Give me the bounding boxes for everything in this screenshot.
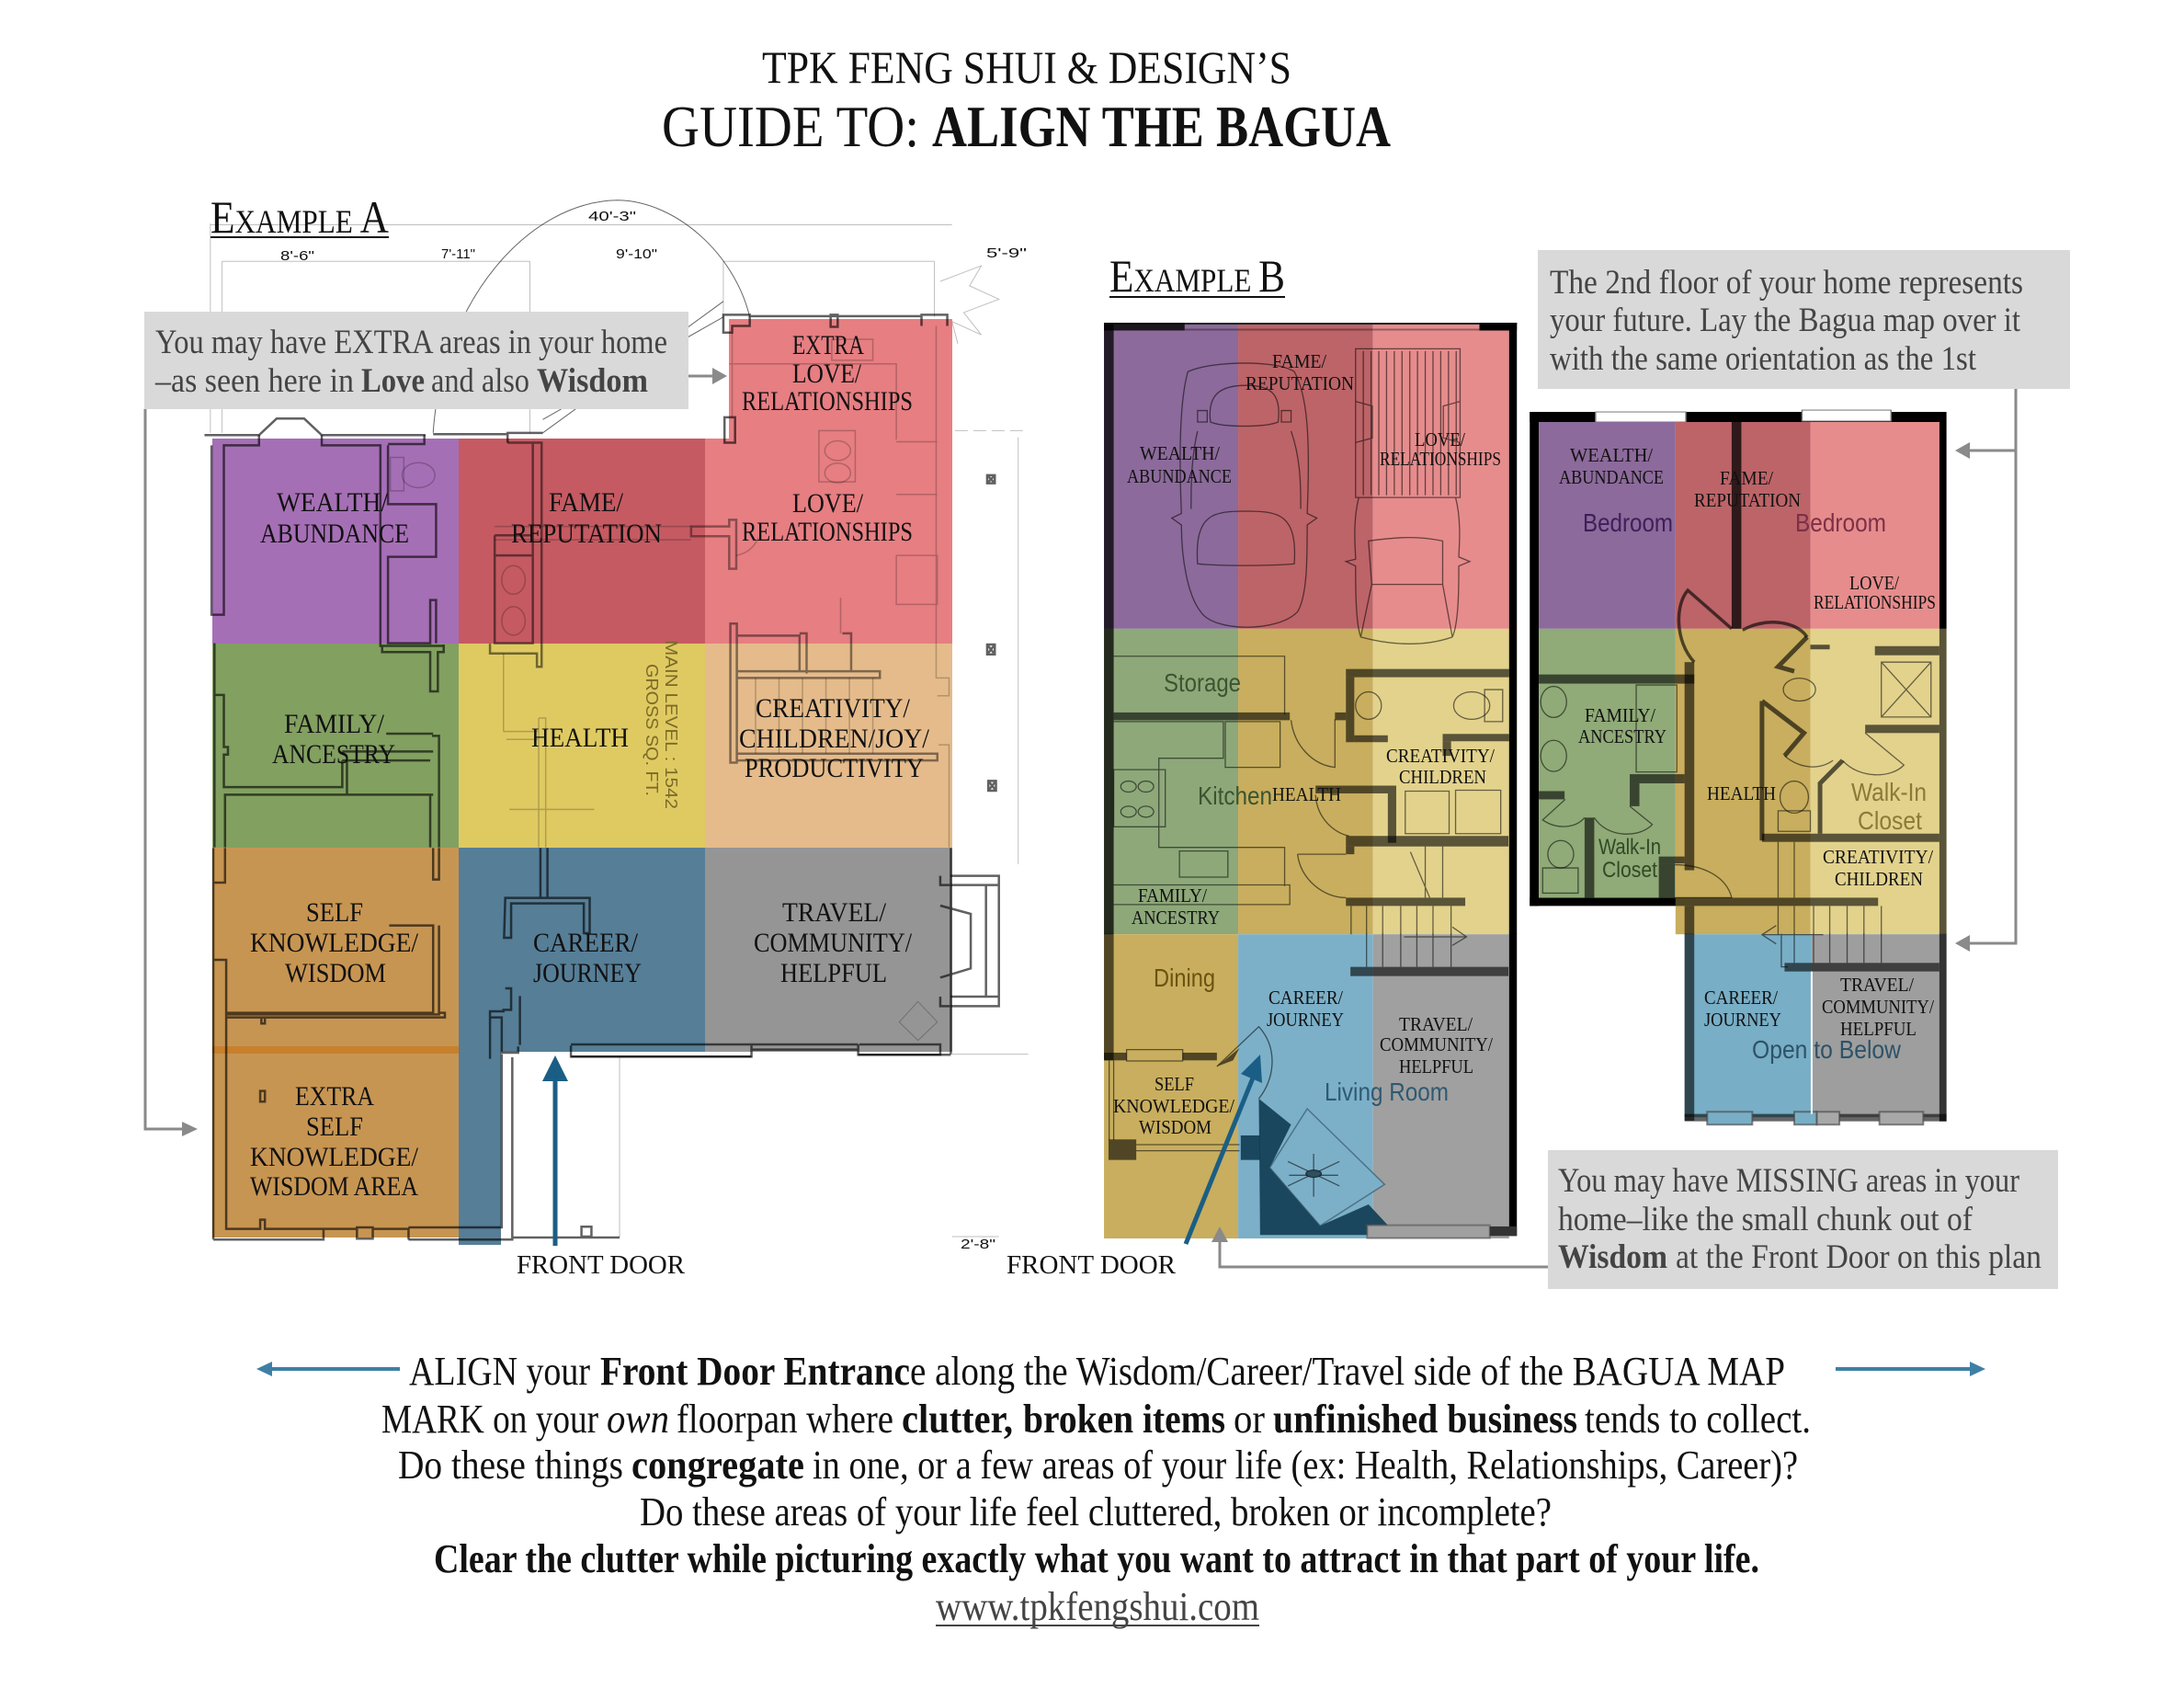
room labels B first floor: Living Room	[1325, 1078, 1449, 1106]
arrow: front door B	[1186, 1055, 1262, 1244]
labels: example A bagua areas: RELATIONSHIPS	[742, 517, 913, 547]
labels: example B first floor areas: ABUNDANCE	[1127, 465, 1232, 487]
labels: second floor bagua areas: JOURNEY	[1704, 1009, 1781, 1031]
labels: example A bagua areas: COMMUNITY/	[754, 928, 913, 958]
labels: example A bagua areas: FAMILY/	[284, 709, 385, 739]
instructions text block: floorpan where	[677, 1397, 893, 1442]
panel: example B second floor	[1211, 250, 2070, 1289]
labels: example A bagua areas: LOVE/	[792, 488, 864, 519]
rotated plan note: GROSS SQ. FT.	[643, 664, 661, 796]
labels: example A bagua areas: HEALTH	[531, 723, 629, 753]
room labels second floor: Closet	[1602, 858, 1657, 883]
labels: example A bagua areas: ANCESTRY	[272, 739, 395, 770]
callout: second floor	[1538, 250, 2070, 389]
plan: black outer walls bottom A	[408, 876, 1029, 1239]
instructions text block: broken items	[1023, 1397, 1225, 1442]
labels: example A bagua areas: KNOWLEDGE/	[250, 1142, 419, 1172]
callout: extra areas	[144, 312, 688, 409]
labels: example B first floor areas: TRAVEL/	[1399, 1013, 1473, 1035]
labels: example B first floor areas: WISDOM	[1139, 1116, 1211, 1138]
arrow: callout to extra wisdom	[145, 409, 198, 1136]
callout: extra areas: Love	[361, 362, 425, 400]
callout: second floor: your future. Lay the Bagua map over it	[1550, 302, 2021, 339]
callout: second floor: The 2nd floor of your home represents	[1550, 264, 2023, 302]
dimension labels: 2'-8"	[961, 1237, 995, 1252]
labels: second floor bagua areas: REPUTATION	[1694, 489, 1801, 511]
callout: extra areas: Wisdom	[537, 362, 648, 400]
rotated plan note	[643, 640, 680, 809]
room labels second floor: Walk-In	[1598, 835, 1661, 860]
labels: second floor bagua areas: COMMUNITY/	[1822, 996, 1934, 1018]
labels: example A bagua areas: RELATIONSHIPS	[742, 386, 913, 416]
labels: example B first floor areas	[1113, 350, 1501, 1138]
labels: second floor bagua areas: CHILDREN	[1835, 868, 1923, 890]
room labels second floor: Closet	[1858, 806, 1922, 835]
room labels B first floor: Kitchen	[1198, 781, 1272, 810]
title: ALIGN THE BAGUA	[932, 94, 1391, 159]
labels: example A bagua areas: CREATIVITY/	[756, 693, 911, 724]
instructions text block: congregate	[631, 1443, 804, 1488]
labels: example A bagua areas: SELF	[306, 1112, 363, 1142]
labels: second floor bagua areas: ABUNDANCE	[1559, 466, 1664, 488]
heading: example A: EXAMPLE A	[210, 191, 389, 243]
labels: example A bagua areas: PRODUCTIVITY	[745, 753, 924, 783]
labels: example A bagua areas: REPUTATION	[511, 519, 662, 549]
instructions text block: Clear the clutter while picturing exactly what you want to attract in that part of your life.	[434, 1536, 1759, 1581]
room labels second floor: Bedroom	[1583, 508, 1673, 537]
labels: example B first floor areas: CAREER/	[1268, 987, 1343, 1009]
labels: example B first floor areas: REPUTATION	[1246, 372, 1354, 394]
labels: example B first floor areas: HELPFUL	[1399, 1055, 1473, 1078]
room labels B first floor: Dining	[1154, 964, 1215, 992]
instructions text block: tends to collect.	[1585, 1397, 1811, 1442]
instructions text block: e along the Wisdom/Career/Travel side of the BAGUA MAP	[910, 1349, 1785, 1394]
labels: second floor bagua areas: TRAVEL/	[1840, 974, 1914, 996]
labels: example A bagua areas: EXTRA	[792, 330, 864, 360]
labels: second floor bagua areas: LOVE/	[1849, 572, 1899, 594]
dimension labels: 40'-3"	[588, 209, 636, 224]
instructions text block: clutter,	[902, 1397, 1013, 1442]
labels: example A bagua areas: CAREER/	[533, 928, 639, 958]
arrow: missing callout to wisdom	[1211, 1226, 1548, 1267]
labels: example B first floor areas: WEALTH/	[1140, 442, 1220, 464]
labels: example A bagua areas: EXTRA	[295, 1081, 374, 1112]
labels: example B first floor areas: JOURNEY	[1267, 1009, 1344, 1031]
callout: missing areas: You may have MISSING areas in your	[1558, 1162, 2019, 1200]
room labels second floor: Walk-In	[1851, 778, 1927, 806]
labels: example B first floor areas: KNOWLEDGE/	[1113, 1095, 1234, 1117]
labels: second floor bagua areas: CREATIVITY/	[1823, 846, 1933, 868]
labels: example A bagua areas: WISDOM	[285, 958, 386, 988]
instructions text block: Do these areas of your life feel cluttered, broken or incomplete?	[640, 1489, 1552, 1534]
bagua colour grid A	[212, 319, 952, 1245]
labels: second floor bagua areas: HEALTH	[1707, 782, 1776, 804]
labels: example A bagua areas: ABUNDANCE	[260, 519, 409, 549]
room labels second floor: Open to Below	[1752, 1035, 1902, 1064]
room labels second floor	[1583, 508, 1927, 1064]
callout: extra areas: –as seen here in	[154, 362, 354, 400]
labels: example B first floor areas: SELF	[1155, 1073, 1194, 1095]
plan: walls second floor lower	[1685, 926, 1947, 1124]
dimension labels	[280, 209, 1027, 1252]
label: front door A: FRONT DOOR	[517, 1251, 685, 1280]
labels: example A bagua areas: HELPFUL	[780, 958, 887, 988]
panel: example B first floor	[1007, 250, 1517, 1280]
dimension labels: 8'-6"	[280, 248, 314, 264]
labels: example B first floor areas: RELATIONSHIPS	[1380, 448, 1501, 470]
labels: second floor bagua areas: ANCESTRY	[1578, 725, 1666, 747]
plan: walls lower B	[1104, 927, 1517, 1238]
labels: second floor bagua areas: HELPFUL	[1840, 1018, 1917, 1040]
callout: missing areas: Wisdom	[1558, 1238, 1667, 1276]
title: TPK FENG SHUI & DESIGN’S	[762, 41, 1291, 93]
callout: second floor: with the same orientation as the 1st	[1550, 340, 1977, 378]
arrow: callout to extra love	[688, 368, 727, 384]
dimension labels: 7'-11"	[441, 246, 475, 262]
instructions text block: Front Door Entranc	[600, 1349, 910, 1394]
labels: example A bagua areas: FAME/	[549, 487, 624, 518]
black outer shell second floor	[1530, 410, 1947, 906]
bagua colour grid second floor	[1539, 422, 1947, 1117]
plan: walls lower A	[213, 848, 971, 1239]
labels: example B first floor areas: CREATIVITY/	[1386, 745, 1495, 767]
labels: example B first floor areas: ANCESTRY	[1132, 907, 1220, 929]
instructions text block: Do these things	[398, 1443, 623, 1488]
arrow: bottom left	[256, 1362, 400, 1376]
labels: second floor bagua areas: RELATIONSHIPS	[1814, 591, 1936, 613]
rotated plan note: MAIN LEVEL : 1542	[662, 640, 680, 809]
callout: extra areas: You may have EXTRA areas in your home	[155, 324, 667, 361]
instructions text block: own	[607, 1397, 669, 1442]
plan: cars and walls upper B	[1104, 323, 1517, 934]
labels: example B first floor areas: LOVE/	[1415, 428, 1465, 451]
dimension labels: 9'-10"	[616, 246, 657, 262]
instructions text block	[381, 1349, 1811, 1629]
label: front door B: FRONT DOOR	[1007, 1251, 1176, 1280]
labels: example B first floor areas: FAME/	[1272, 350, 1326, 372]
plan: walls upper A	[211, 325, 949, 848]
plan: faint dimension lines	[210, 200, 1029, 864]
labels: example A bagua areas: TRAVEL/	[782, 897, 887, 928]
room labels B first floor: Storage	[1164, 668, 1241, 697]
labels: example A bagua areas: LOVE/	[792, 359, 862, 389]
dimension labels: 5'-9"	[986, 245, 1027, 261]
heading: example B: EXAMPLE B	[1109, 250, 1285, 302]
labels: example A bagua areas: JOURNEY	[533, 958, 642, 988]
instructions text block: unfinished business	[1273, 1397, 1577, 1442]
labels: example A bagua areas	[250, 330, 930, 1202]
instructions text block: in one, or a few areas of your life (ex: Health, Relationships, Career)?	[813, 1443, 1798, 1488]
instructions text block: MARK on your	[381, 1397, 598, 1442]
bagua colour grid B first floor	[1104, 325, 1509, 1238]
instructions text block: www.tpkfengshui.com	[936, 1584, 1259, 1629]
labels: example A bagua areas: WEALTH/	[277, 487, 389, 518]
labels: example B first floor areas: CHILDREN	[1399, 766, 1486, 788]
arrows: second floor callout to plan	[1955, 389, 2016, 952]
room labels B first floor	[1154, 668, 1449, 1106]
plan: walls second floor upper	[1539, 422, 1947, 934]
arrow: bottom right	[1836, 1362, 1985, 1376]
labels: example A bagua areas: KNOWLEDGE/	[250, 928, 419, 958]
arrow: front door A	[542, 1055, 568, 1246]
labels: example A bagua areas: CHILDREN/JOY/	[739, 724, 930, 754]
panel: example A floor plan	[144, 191, 1029, 1280]
callout: missing areas: at the Front Door on this plan	[1676, 1238, 2042, 1276]
labels: second floor bagua areas: FAMILY/	[1585, 704, 1655, 726]
instructions text block: or	[1234, 1397, 1265, 1442]
instructions text block: ALIGN your	[409, 1349, 590, 1394]
callout: missing areas	[1548, 1150, 2058, 1289]
callout: extra areas: and also	[431, 362, 529, 400]
callout: missing areas: home–like the small chunk out of	[1558, 1201, 1974, 1238]
room labels second floor: Bedroom	[1795, 508, 1886, 537]
labels: second floor bagua areas: CAREER/	[1704, 987, 1778, 1009]
labels: example B first floor areas: FAMILY/	[1138, 884, 1207, 907]
plan: black outer walls top A	[204, 314, 948, 442]
title	[662, 41, 1391, 159]
labels: example A bagua areas: SELF	[306, 897, 363, 928]
labels: second floor bagua areas	[1559, 444, 1936, 1040]
labels: example B first floor areas: HEALTH	[1272, 783, 1341, 805]
labels: second floor bagua areas: WEALTH/	[1570, 444, 1653, 466]
labels: example A bagua areas: WISDOM AREA	[250, 1171, 418, 1202]
labels: example B first floor areas: COMMUNITY/	[1380, 1033, 1493, 1055]
labels: second floor bagua areas: FAME/	[1720, 467, 1773, 489]
title: GUIDE TO:	[662, 94, 919, 159]
